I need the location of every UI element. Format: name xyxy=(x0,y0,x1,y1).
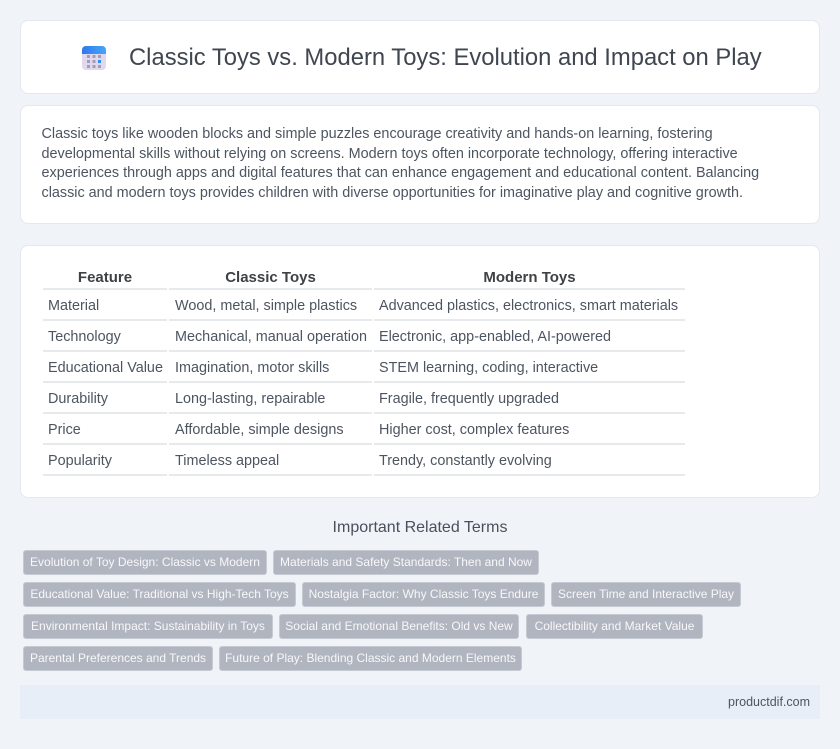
title: Classic Toys vs. Modern Toys: Evolution and Impact on Play xyxy=(129,44,762,71)
row: Educational Value: STEM learning, coding, interactive xyxy=(379,360,598,376)
table header xyxy=(43,269,685,290)
row: Educational Value: Imagination, motor skills xyxy=(175,360,329,376)
row: Durability: Fragile, frequently upgraded xyxy=(379,391,559,407)
row: Durability: Durability xyxy=(48,391,108,407)
row: Popularity xyxy=(43,453,685,476)
tag xyxy=(23,646,213,671)
tag: Parental Preferences and Trends xyxy=(30,651,206,665)
tag xyxy=(551,582,741,607)
heading: related terms: Important Related Terms xyxy=(333,519,507,536)
table header: Feature xyxy=(78,269,132,286)
intro text: developmental skills without relying on screens. Modern toys often incorporate technology, offering interactive xyxy=(42,146,738,162)
row: Price: Higher cost, complex features xyxy=(379,422,569,438)
row: Material: Wood, metal, simple plastics xyxy=(175,298,357,314)
tag xyxy=(302,582,545,607)
footer source: productdif.com xyxy=(728,695,810,709)
panel: header xyxy=(20,20,820,94)
row: Price: Price xyxy=(48,422,81,438)
tag xyxy=(23,614,273,639)
tag xyxy=(219,646,522,671)
row: Educational Value: Educational Value xyxy=(48,360,163,376)
row: Popularity: Trendy, constantly evolving xyxy=(379,453,552,469)
tag: Evolution of Toy Design: Classic vs Modern xyxy=(30,555,260,569)
tag: Nostalgia Factor: Why Classic Toys Endure xyxy=(309,587,538,601)
footer bar xyxy=(20,685,820,719)
tag xyxy=(23,550,267,575)
intro text xyxy=(42,126,759,201)
row: Material: Advanced plastics, electronics, smart materials xyxy=(379,298,678,314)
row: Price xyxy=(43,422,685,445)
row: Technology: Technology xyxy=(48,329,121,345)
row: Durability: Long-lasting, repairable xyxy=(175,391,325,407)
intro text: Classic toys like wooden blocks and simple puzzles encourage creativity and hands-on learning, fostering xyxy=(42,126,713,142)
row: Popularity: Popularity xyxy=(48,453,112,469)
row: Educational Value xyxy=(43,360,685,383)
tag: Materials and Safety Standards: Then and Now xyxy=(280,555,532,569)
table header: Classic Toys xyxy=(225,269,316,286)
tag xyxy=(279,614,519,639)
row: Technology: Mechanical, manual operation xyxy=(175,329,367,345)
related terms tags xyxy=(23,550,741,671)
row: Material: Material xyxy=(48,298,99,314)
tag: Social and Emotional Benefits: Old vs New xyxy=(285,619,513,633)
row: Durability xyxy=(43,391,685,414)
tag: Environmental Impact: Sustainability in Toys xyxy=(31,619,265,633)
table header: Modern Toys xyxy=(483,269,576,286)
tag xyxy=(273,550,539,575)
icon: calendar grid xyxy=(82,46,106,70)
row: Material xyxy=(43,298,685,321)
tag: Educational Value: Traditional vs High-Tech Toys xyxy=(30,587,289,601)
intro text: experiences through apps and digital features that can enhance engagement and educational content. Balancing xyxy=(42,165,759,181)
row: Technology: Electronic, app-enabled, AI-powered xyxy=(379,329,611,345)
row: Price: Affordable, simple designs xyxy=(175,422,344,438)
intro text: classic and modern toys provides children with diverse opportunities for imaginative play and cognitive growth. xyxy=(42,185,743,201)
tag xyxy=(526,614,703,639)
row: Popularity: Timeless appeal xyxy=(175,453,279,469)
panel: comparison table xyxy=(20,245,820,498)
tag: Future of Play: Blending Classic and Modern Elements xyxy=(225,651,516,665)
panel: introduction xyxy=(20,105,820,224)
tag: Screen Time and Interactive Play xyxy=(558,587,734,601)
tag: Collectibility and Market Value xyxy=(535,619,694,633)
tag xyxy=(23,582,296,607)
row: Technology xyxy=(43,329,685,352)
